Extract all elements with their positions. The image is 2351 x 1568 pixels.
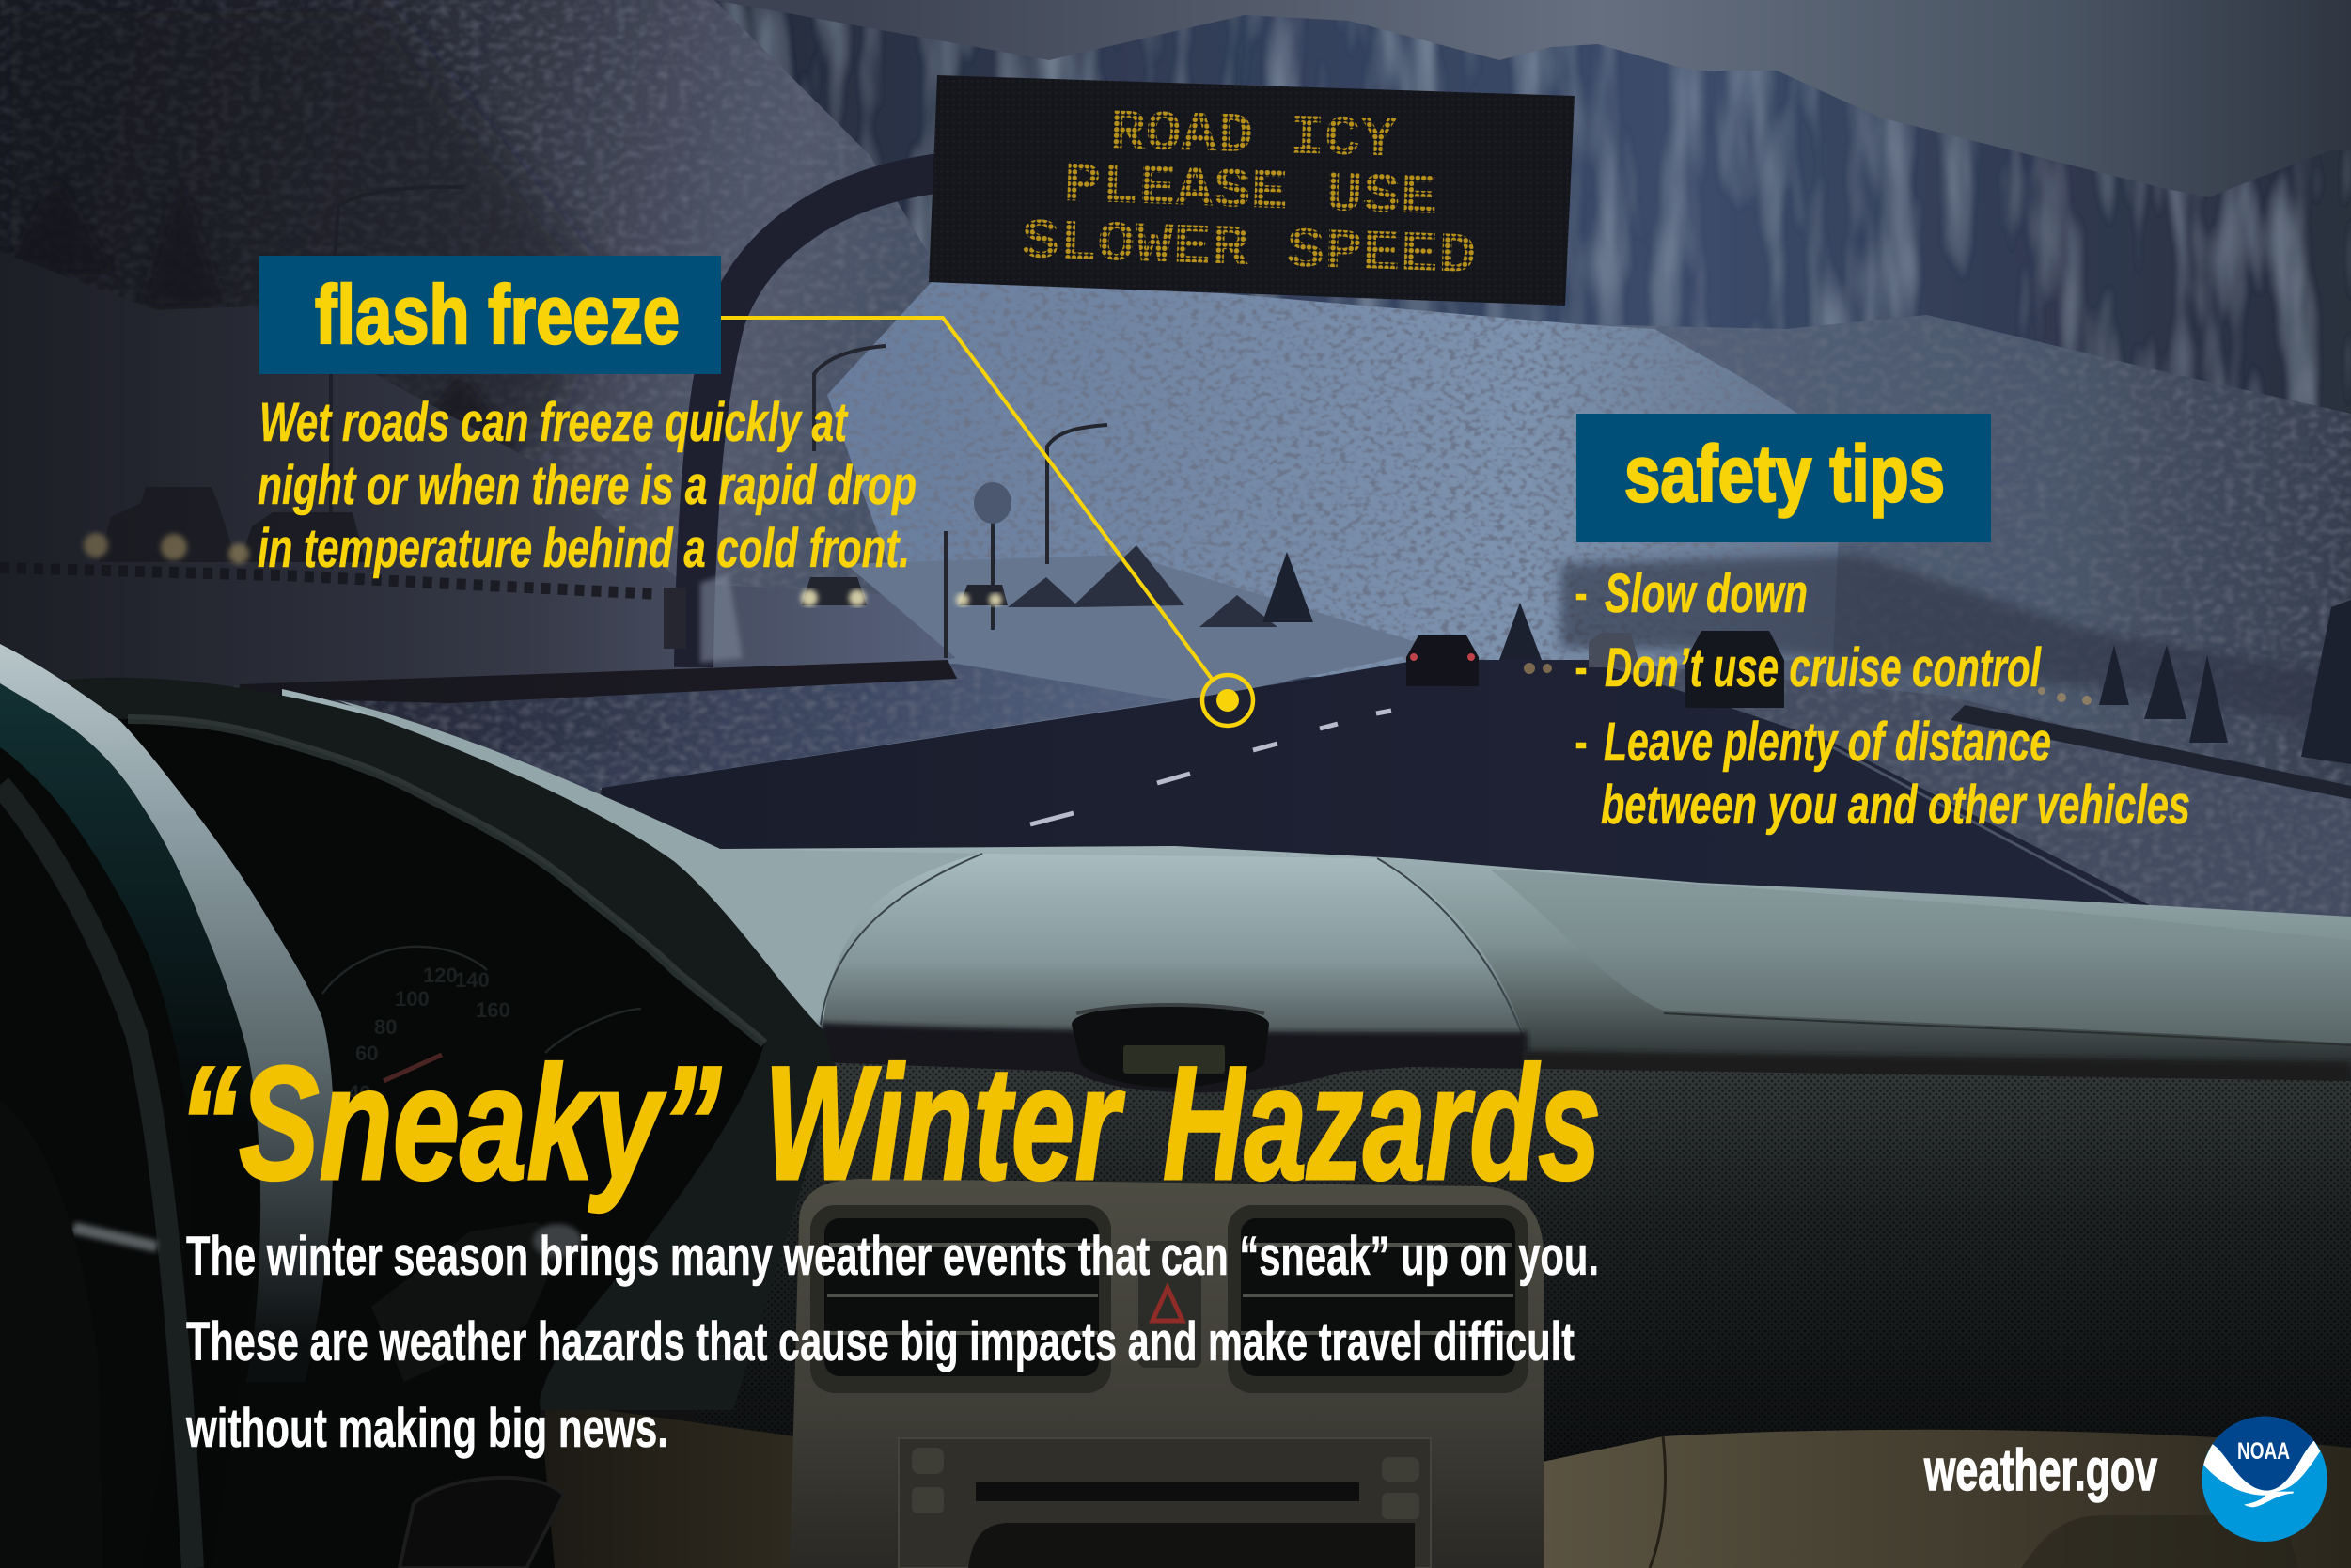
speedometer numerals: 160 bbox=[476, 998, 510, 1022]
logo wordmark: NOAA bbox=[2237, 1438, 2290, 1465]
intro text bbox=[185, 1226, 1599, 1459]
left vignette bbox=[0, 0, 714, 752]
right panel lower line bbox=[1664, 1013, 2351, 1045]
safety tips heading: safety tips bbox=[1624, 430, 1945, 518]
steering column dark bbox=[0, 1100, 103, 1568]
logo dark sky bbox=[2203, 1416, 2320, 1508]
right beige trim bbox=[1543, 1430, 2351, 1568]
callout: flash freeze bbox=[258, 256, 1253, 726]
road surface bbox=[592, 660, 2171, 940]
right road edge line bbox=[1833, 747, 2134, 907]
speedometer numerals bbox=[348, 964, 510, 1105]
light poles bbox=[331, 187, 1107, 658]
gauge needle bbox=[384, 1055, 442, 1081]
steering wheel bbox=[0, 644, 334, 1568]
central hump bbox=[821, 854, 1528, 1072]
horn stalk bbox=[71, 1222, 158, 1252]
dash upper surface bbox=[282, 689, 2351, 1109]
flash freeze description: night or when there is a rapid drop bbox=[258, 455, 917, 516]
flash freeze description bbox=[258, 392, 917, 579]
flash freeze description: in temperature behind a cold front. bbox=[258, 518, 910, 579]
speedometer numerals: 100 bbox=[395, 987, 430, 1011]
fence on left embankment bbox=[0, 568, 658, 594]
wheel inner band bbox=[0, 683, 259, 1568]
logo bird bbox=[2202, 1441, 2320, 1507]
wheel rim highlight bbox=[0, 644, 334, 1382]
clock hood bbox=[1072, 1005, 1269, 1088]
left beige trim bbox=[541, 1402, 808, 1568]
car ahead bbox=[1406, 635, 1479, 686]
background photo: snowy mountain highway bbox=[0, 0, 2351, 940]
safety tips list: Slow down bbox=[1605, 563, 1808, 624]
website: weather.gov bbox=[1923, 1438, 2157, 1503]
upper-left shade bbox=[0, 0, 602, 462]
safety tips list: Leave plenty of distance bbox=[1604, 712, 2051, 773]
speedometer bbox=[322, 947, 641, 1105]
flash freeze heading box bbox=[259, 256, 721, 374]
left trees bbox=[6, 179, 522, 451]
speedometer numerals: 60 bbox=[355, 1042, 378, 1065]
lower dash textured panel bbox=[696, 1058, 2351, 1568]
intro text: The winter season brings many weather events that can “sneak” up on you. bbox=[186, 1226, 1599, 1287]
dashboard bbox=[0, 644, 2351, 1568]
switch knob bbox=[533, 1224, 582, 1258]
speedometer numerals: 120 bbox=[423, 964, 458, 987]
right air vent bbox=[1228, 1205, 1528, 1393]
dash shadow line bbox=[1523, 1051, 2351, 1095]
speedometer numerals: 80 bbox=[374, 1015, 397, 1039]
pickup truck ahead bbox=[1589, 631, 1784, 708]
hump seam bbox=[821, 854, 1524, 1039]
left suvs bbox=[84, 487, 366, 564]
binnacle hood interior bbox=[0, 719, 764, 1568]
left dash pale area bbox=[338, 700, 987, 1034]
stop sign back bbox=[974, 482, 1011, 524]
intro text: These are weather hazards that cause big impacts and make travel difficult bbox=[186, 1311, 1575, 1372]
left air vent bbox=[810, 1205, 1111, 1393]
title: Hazards bbox=[1163, 1033, 1601, 1214]
flash freeze heading: flash freeze bbox=[315, 268, 680, 361]
left snow embankment bbox=[0, 252, 1175, 790]
valley snow bbox=[470, 555, 1438, 790]
evergreen trees bbox=[1262, 552, 2351, 764]
icon: NOAA logo bbox=[2200, 1413, 2331, 1542]
road marker bbox=[1202, 675, 1253, 726]
radio bbox=[899, 1438, 1431, 1568]
variable message sign bbox=[929, 75, 1575, 306]
sign message: SLOWER SPEED bbox=[1020, 211, 1477, 290]
town band bbox=[1560, 555, 2351, 733]
safety tips heading box bbox=[1576, 414, 1991, 542]
right snowbank along road bbox=[1589, 660, 2351, 921]
title: Winter bbox=[764, 1033, 1125, 1214]
hump shadow bbox=[821, 1023, 1528, 1095]
hazard button bbox=[1138, 1241, 1201, 1368]
binnacle inner rim bbox=[128, 719, 764, 1043]
sign message: PLEASE USE bbox=[1062, 154, 1438, 231]
guardrail left bbox=[240, 660, 957, 703]
instrument binnacle hood bbox=[0, 678, 837, 1410]
sign message bbox=[1020, 102, 1477, 290]
safety tips list bbox=[1576, 563, 2190, 836]
sign gantry arm bbox=[694, 173, 940, 667]
safety tips list: Don’t use cruise control bbox=[1605, 637, 2042, 698]
far mountain bbox=[714, 0, 2351, 846]
centre snowy slope bbox=[714, 282, 1842, 677]
sky bbox=[0, 0, 2351, 940]
gantry post snow bbox=[700, 573, 743, 663]
guardrail right bbox=[1951, 705, 2351, 799]
distant lights bbox=[1524, 663, 2092, 705]
steering column switches bbox=[371, 1222, 564, 1382]
logo disc bbox=[2202, 1417, 2327, 1542]
right dash panel bbox=[1490, 870, 2351, 1043]
snowbank below guardrail bbox=[226, 664, 1175, 818]
road lane dashes bbox=[1030, 711, 1391, 824]
ignition key bbox=[400, 1478, 564, 1568]
flash freeze description: Wet roads can freeze quickly at bbox=[259, 392, 849, 453]
title: “Sneaky” bbox=[179, 1033, 721, 1214]
sign panel bbox=[929, 75, 1575, 306]
houses bbox=[1008, 545, 1277, 627]
centre console bbox=[790, 1179, 1544, 1568]
left hillside bbox=[0, 0, 940, 602]
sign message: ROAD ICY bbox=[1108, 102, 1397, 174]
leader line bbox=[721, 318, 1212, 679]
intro text: without making big news. bbox=[185, 1398, 668, 1459]
speedometer numerals: 40 bbox=[348, 1081, 370, 1105]
roadside box bbox=[664, 588, 686, 649]
right snowy slope bbox=[1504, 315, 2351, 902]
oncoming cars bbox=[801, 577, 1008, 606]
wheel inner strip bbox=[0, 785, 193, 1568]
panel: safety tips bbox=[1576, 414, 2190, 836]
speedometer numerals: 140 bbox=[455, 968, 490, 992]
title bbox=[179, 1033, 1601, 1214]
